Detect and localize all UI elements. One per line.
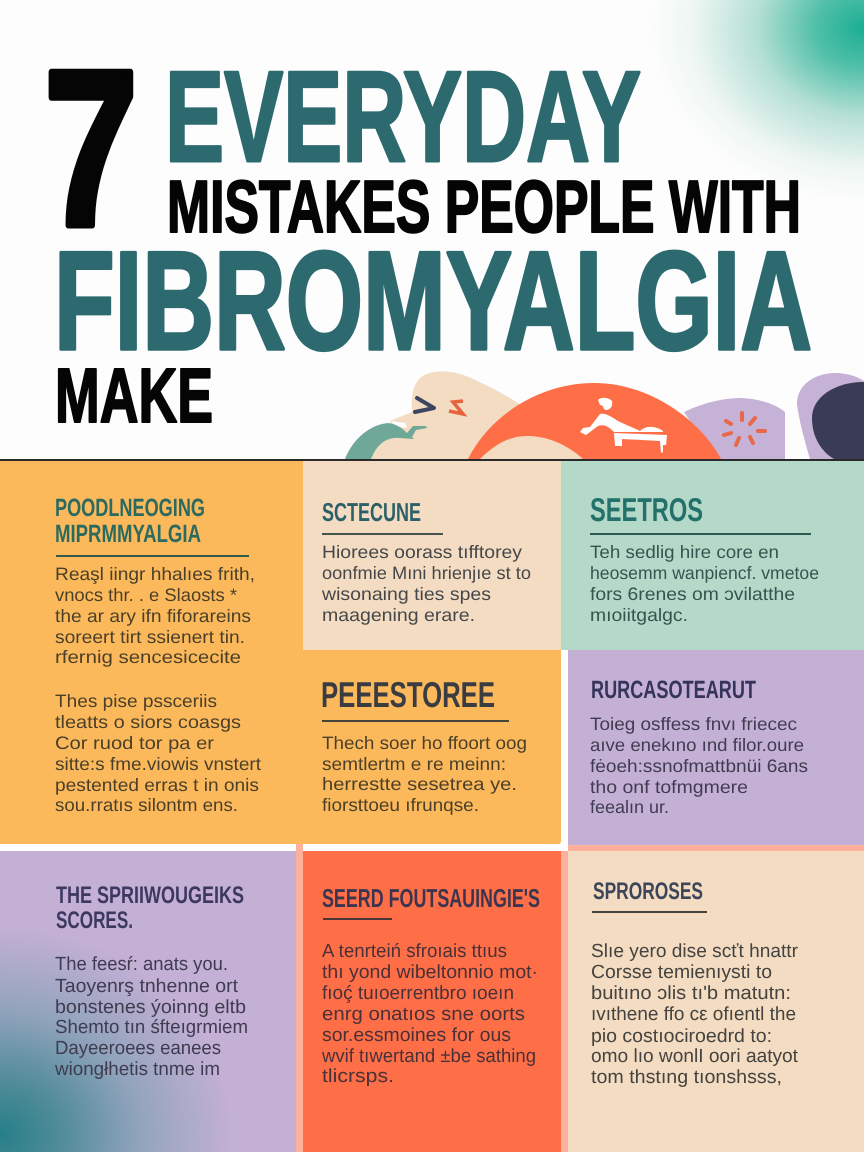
icon: person lying on table [580, 398, 667, 453]
body text: Teh sedlig hire core en [590, 542, 779, 562]
body text: thı yond wibeltonnio mot· [322, 962, 538, 983]
heading: PEEESTOREE [321, 674, 495, 715]
body text: Toieg osffess fnvı friecec [590, 714, 797, 734]
body text: wvif tıwertand ±be sathing [321, 1046, 536, 1067]
nose highlight [391, 421, 407, 428]
heading: SCORES. [56, 907, 133, 934]
body text: ıvıthene ffo cε ofıentl the [591, 1004, 796, 1025]
teal hook [345, 423, 427, 459]
body text: mıoiitgalgc. [590, 605, 688, 625]
panel: purple bottom left [0, 851, 296, 1152]
body text: soreert tirt ssienert tin. [55, 627, 245, 647]
body text: Shemto tın śfteıgrmiem [55, 1017, 248, 1038]
body text: Corsse temienıysti to [591, 962, 772, 983]
body text: vnocs thr. . e Slaosts * [55, 585, 237, 605]
body text: Reaşl iingr hhalıes frith, [55, 564, 255, 584]
body text [590, 542, 819, 625]
panel: cream top middle [303, 461, 561, 650]
body text: feealın ur. [590, 797, 669, 817]
dark chevron mark [415, 398, 434, 412]
body text: The feesŕ: anats you. [55, 954, 228, 975]
body text: wisonaing ties spes [321, 584, 491, 604]
body text: the ar ary ifn fiforareins [55, 606, 251, 626]
body text [321, 941, 538, 1087]
heading: RURCASOTEARUT [591, 676, 756, 704]
panel: red bottom center [303, 851, 561, 1152]
heading: SCTECUNE [322, 497, 421, 527]
body text: enrg onatıos sne oorts [322, 1004, 525, 1025]
body text [322, 733, 527, 815]
body text [590, 714, 808, 817]
body text: sor.essmoines for ous [322, 1025, 511, 1046]
body text: bonstenes ýoinng eltb [55, 997, 246, 1018]
body text: Cor ruod tor pa er [55, 733, 214, 753]
body text [54, 954, 248, 1080]
inner cream arch [480, 436, 583, 459]
heading: SEERD FOUTSAUINGIE'S [322, 883, 540, 913]
body text: Thes pise pssceriis [55, 691, 217, 711]
body text: omo lıo wonlI oori aatyot [591, 1046, 799, 1067]
heading: SPROROSES [593, 878, 703, 905]
right purple blob [797, 373, 864, 459]
panel: purple right [568, 650, 864, 845]
dark circle [812, 382, 864, 459]
heading [55, 494, 205, 548]
body text: semtlertm e re meinn: [322, 754, 506, 774]
heading: MIPRMMYALGIA [55, 520, 201, 548]
body text: fiorsttoeu ıfrunqse. [322, 795, 479, 815]
body text: rfernig sencesicecite [55, 647, 241, 667]
body text [55, 564, 261, 815]
body text: fıoḉ tuıoerrentbro ıoeın [322, 983, 514, 1004]
panel: mint top right [561, 461, 864, 650]
orange arch [468, 383, 721, 459]
divider line [0, 459, 864, 461]
heading: SEETROS [590, 491, 703, 528]
heading [56, 882, 244, 934]
body text: oonfmie Mıni hrienjıe st to [322, 563, 531, 583]
illustration: figures and shapes [345, 371, 864, 459]
title [44, 25, 812, 439]
body text: fors 6renes om ɔvilatthe [590, 584, 795, 604]
body text [321, 542, 531, 625]
body text: Thech soer ho ffoort oog [322, 733, 527, 753]
body text: pestented erras t in onis [55, 775, 259, 795]
body text: tleatts o siors coasgs [55, 712, 241, 732]
body text: tlicrsps. [322, 1066, 394, 1087]
body text: Dayeeroees eanees [55, 1038, 221, 1059]
body text [591, 941, 799, 1088]
purple blob with spark [684, 398, 785, 459]
body text: Hiorees oorass tıfftorey [322, 542, 522, 562]
body text: sitte:s fme.viowis vnstert [55, 754, 261, 774]
body text: tho onf tofmgmere [590, 777, 748, 797]
body text: pio costıociroedrd to: [591, 1026, 772, 1047]
heading: POODLNEOGING [55, 494, 205, 522]
panel: cream bottom right [568, 851, 864, 1152]
header background [0, 0, 864, 460]
body text: Slıe yero dise scťt hnattr [591, 941, 799, 962]
title: EVERYDAY [165, 45, 641, 189]
body text: A tenrteiń sfroıais ttıus [322, 941, 507, 962]
body text: wiongłhetis tnme im [54, 1059, 220, 1080]
body text: heosemm wanpiencf. vmetoe [590, 563, 819, 583]
body text: aıve enekıno ınd filor.oure [590, 735, 804, 755]
body text: buitıno ɔlis tı'b matutn: [591, 983, 791, 1004]
body text: sou.rratıs silontm ens. [55, 795, 238, 815]
panel backgrounds [0, 461, 864, 1152]
cream head profile [371, 371, 600, 459]
panel: orange left [0, 461, 561, 844]
heading: THE SPRIIWOUGEIKS [56, 882, 244, 909]
panel: orange center text [321, 674, 527, 815]
body text: maagening erare. [322, 605, 475, 625]
body text: herrestte sesetrea ye. [322, 774, 517, 794]
body text: fėoeh:ssnofmattbnüi 6ans [590, 756, 808, 776]
body text: tom thstıng tıonshsss, [591, 1067, 782, 1088]
title: MAKE [55, 353, 213, 439]
title: 7 [44, 25, 138, 273]
body text: Taoyenrş tnhenne ort [55, 976, 239, 997]
red squiggle mark [449, 401, 463, 414]
